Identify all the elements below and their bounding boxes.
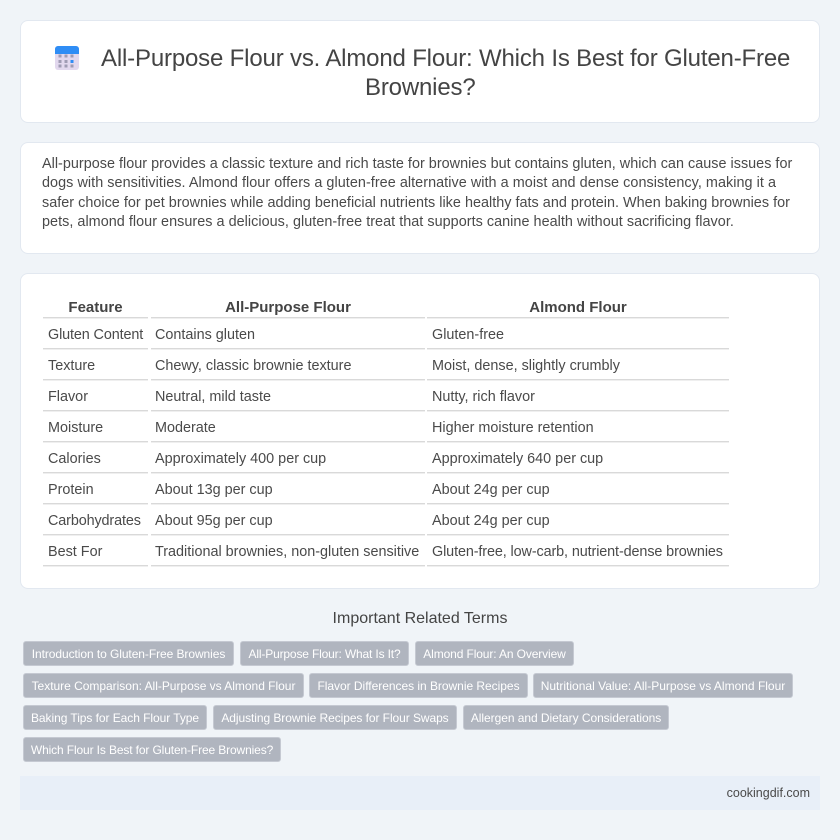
tag: Adjusting Brownie Recipes for Flour Swaps (221, 711, 449, 725)
title: All-Purpose Flour vs. Almond Flour: Which Is Best for Gluten-Free (101, 45, 790, 72)
tag (23, 705, 207, 730)
row: calories: Approximately 640 per cup (432, 451, 603, 467)
row: moisture: Moisture (48, 420, 103, 436)
tag (533, 673, 793, 698)
tag: Which Flour Is Best for Gluten-Free Brownies? (31, 743, 273, 757)
tag (213, 705, 457, 730)
row: carbohydrates: About 24g per cup (432, 513, 550, 529)
row: gluten content: Gluten Content (48, 327, 143, 343)
row: carbohydrates (48, 513, 550, 529)
tag: Baking Tips for Each Flour Type (31, 711, 199, 725)
row: carbohydrates: Carbohydrates (48, 513, 141, 529)
title panel (20, 20, 820, 123)
tag: Texture Comparison: All-Purpose vs Almond Flour (32, 679, 295, 693)
row: protein: About 24g per cup (432, 482, 550, 498)
intro text: safer choice for pet brownies while adding beneficial nutrients like healthy fats and protein. When baking brownies for (42, 195, 790, 211)
related term tags (23, 641, 793, 762)
row: calories: Approximately 400 per cup (155, 451, 326, 467)
row: flavor: Nutty, rich flavor (432, 389, 535, 405)
footer source: cookingdif.com (727, 786, 810, 800)
row: texture: Moist, dense, slightly crumbly (432, 358, 620, 374)
row: calories (48, 451, 603, 467)
row: best for: Best For (48, 544, 102, 560)
table panel (20, 273, 820, 589)
footer bar (20, 776, 820, 810)
intro text: pets, almond flour ensures a delicious, gluten-free treat that supports canine health without sacrificing flavor. (42, 214, 734, 230)
table header row: Almond Flour (529, 299, 627, 316)
row: gluten content: Gluten-free (432, 327, 504, 343)
intro text: dogs with sensitivities. Almond flour offers a gluten-free alternative with a moist and dense consistency, making it a (42, 175, 776, 191)
tag (463, 705, 669, 730)
row: best for: Traditional brownies, non-gluten sensitive (155, 544, 419, 560)
table header row (68, 299, 627, 316)
intro text (42, 156, 792, 230)
row: moisture (48, 420, 594, 436)
tag (23, 737, 281, 762)
icon: calendar (55, 46, 79, 70)
row: calories: Calories (48, 451, 101, 467)
row: best for: Gluten-free, low-carb, nutrient-dense brownies (432, 544, 723, 560)
row: protein (48, 482, 550, 498)
tag (415, 641, 574, 666)
row: gluten content: Contains gluten (155, 327, 255, 343)
row: carbohydrates: About 95g per cup (155, 513, 273, 529)
tag: All-Purpose Flour: What Is It? (249, 647, 400, 661)
tag (240, 641, 409, 666)
row: texture (48, 358, 620, 374)
title: Brownies? (365, 74, 476, 101)
row: moisture: Moderate (155, 420, 216, 436)
intro text: All-purpose flour provides a classic texture and rich taste for brownies but contains gluten, which can cause issues for (42, 156, 792, 172)
row: gluten content (48, 327, 504, 343)
tag (309, 673, 528, 698)
row: protein: About 13g per cup (155, 482, 273, 498)
row: moisture: Higher moisture retention (432, 420, 594, 436)
row: protein: Protein (48, 482, 94, 498)
title (101, 45, 790, 101)
row: texture: Texture (48, 358, 95, 374)
comparison table (43, 299, 729, 567)
tag: Nutritional Value: All-Purpose vs Almond Flour (541, 679, 785, 693)
tag (23, 641, 234, 666)
row: flavor (48, 389, 535, 405)
intro panel (20, 142, 820, 254)
table header row: Feature (68, 299, 123, 316)
tag: Almond Flour: An Overview (423, 647, 566, 661)
tag (23, 673, 304, 698)
related terms heading: Important Related Terms (333, 610, 507, 627)
row: best for (48, 544, 723, 560)
row: flavor: Flavor (48, 389, 88, 405)
tag: Flavor Differences in Brownie Recipes (317, 679, 520, 693)
tag: Allergen and Dietary Considerations (471, 711, 661, 725)
row: texture: Chewy, classic brownie texture (155, 358, 351, 374)
row: flavor: Neutral, mild taste (155, 389, 271, 405)
table header row: All-Purpose Flour (225, 299, 351, 316)
tag: Introduction to Gluten-Free Brownies (32, 647, 225, 661)
